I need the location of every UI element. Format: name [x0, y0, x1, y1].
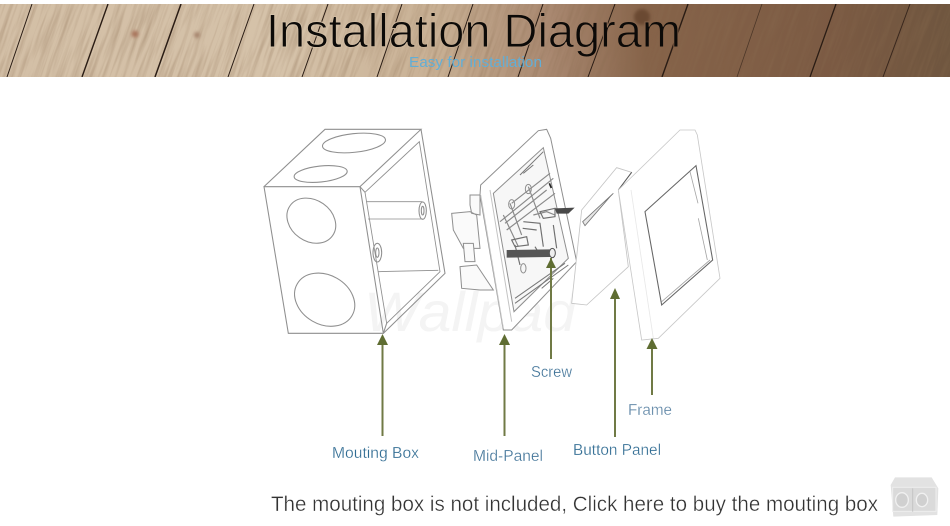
arrow: button panel	[610, 288, 620, 437]
watermark: Wallpad	[364, 280, 578, 343]
arrow: screw	[546, 258, 556, 359]
arrow: mounting box	[377, 334, 388, 436]
arrow: mid-panel	[499, 334, 510, 436]
mounting box drawing	[264, 129, 445, 337]
icon: mounting box thumbnail	[891, 477, 938, 517]
label: mounting box: Mouting Box	[332, 445, 419, 462]
arrow: frame	[646, 338, 658, 395]
label: screw: Screw	[531, 364, 573, 381]
button panel drawing	[572, 168, 632, 305]
upper screw	[555, 208, 575, 214]
label: button panel: Button Panel	[573, 442, 661, 459]
label: mid-panel: Mid-Panel	[473, 448, 543, 465]
mid-panel drawing	[452, 129, 577, 330]
title: Installation Diagram	[266, 4, 681, 57]
frame drawing	[618, 130, 720, 340]
purchase note: The mouting box is not included, Click here to buy the mouting box	[271, 492, 878, 516]
label: frame: Frame	[628, 402, 672, 419]
subtitle: Easy for installation	[409, 54, 542, 71]
lower screw	[507, 249, 550, 258]
header banner: wood planks	[0, 4, 950, 77]
